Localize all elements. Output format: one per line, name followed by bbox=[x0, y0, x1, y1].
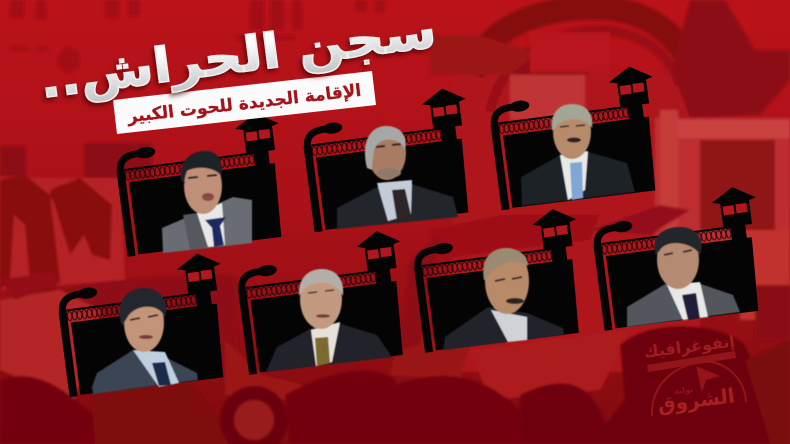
portrait 4: man in navy suit bbox=[92, 288, 198, 394]
background: prison gate arch bbox=[430, 8, 700, 372]
background: right wall and door bbox=[655, 0, 790, 340]
background: photographers on the left bbox=[0, 175, 125, 300]
background: vehicle and crowd bbox=[0, 205, 690, 400]
subtitle banner bbox=[113, 71, 376, 134]
title: سجن الحراش.. bbox=[36, 2, 440, 110]
background: window bars bbox=[0, 143, 152, 179]
background: upper left figures bbox=[10, 0, 385, 73]
background: dark riot police silhouettes bbox=[0, 326, 790, 444]
portrait 6: bald man with moustache bbox=[443, 248, 564, 350]
prison frame 5 bbox=[233, 228, 415, 375]
portrait 5: elderly bald man with patterned tie bbox=[266, 269, 392, 372]
watermark: infographic logo: الشروق bbox=[656, 383, 736, 417]
watermark: infographic logo: بوابة bbox=[674, 385, 693, 396]
portrait 3: man with moustache and blue tie bbox=[521, 104, 635, 206]
prison frame 1 bbox=[111, 110, 293, 257]
prison frame 2 bbox=[298, 86, 480, 232]
prison frame 6 bbox=[409, 206, 591, 353]
portrait 7: man in grey suit with dark tie bbox=[627, 227, 740, 327]
portrait 1: man in grey suit bbox=[162, 151, 252, 253]
prison frame 3 bbox=[485, 64, 667, 210]
portrait 2: man with grey hair and dark suit bbox=[337, 126, 458, 229]
subtitle banner: الإقامة الجديدة للحوت الكبير bbox=[126, 81, 362, 127]
prison frame 7 bbox=[588, 184, 770, 331]
watermark: infographic logo bbox=[643, 332, 746, 417]
prison frame 4 bbox=[53, 251, 235, 397]
watermark: infographic logo: إنفوغرافيك bbox=[643, 332, 736, 362]
